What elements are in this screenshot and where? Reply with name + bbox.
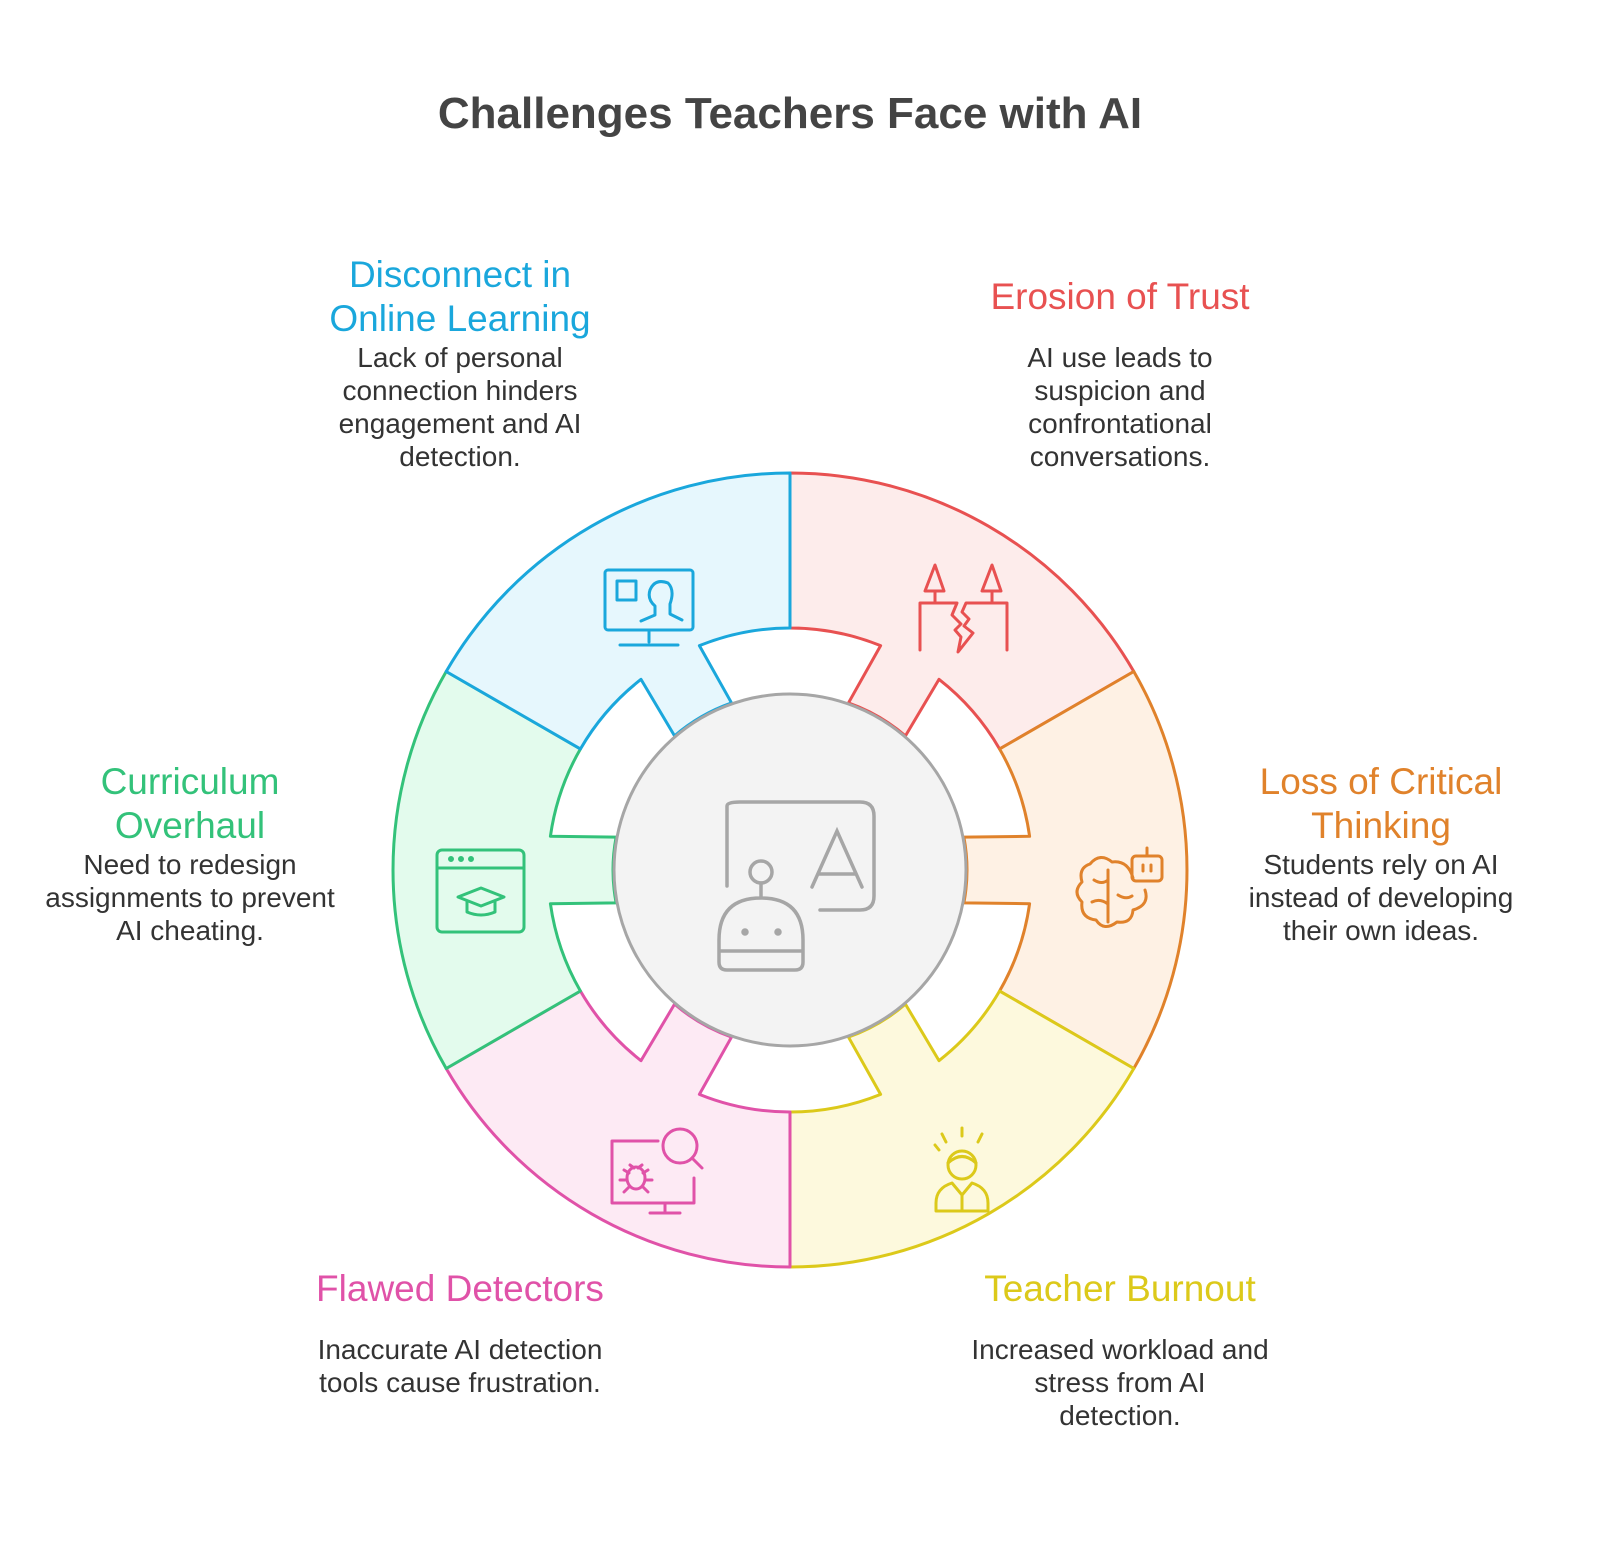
text: critical thinking: their own ideas. xyxy=(1283,915,1479,946)
text: curriculum: Need to redesign xyxy=(83,849,297,880)
icon: monitor person xyxy=(605,570,693,645)
text: curriculum: Curriculum xyxy=(101,761,279,802)
segment: curriculum xyxy=(393,672,616,1068)
text: erosion of trust xyxy=(990,276,1250,472)
segment: disconnect xyxy=(420,427,875,819)
text: curriculum: AI cheating. xyxy=(116,915,264,946)
text: flawed detectors: Inaccurate AI detection xyxy=(318,1334,602,1365)
icon: trust broken xyxy=(920,565,1007,652)
segment: burnout xyxy=(705,921,1160,1313)
text: curriculum xyxy=(45,761,335,946)
segment: flawed detectors xyxy=(420,921,875,1313)
segment: critical thinking xyxy=(964,672,1187,1068)
text: curriculum: assignments to prevent xyxy=(45,882,335,913)
text: erosion of trust: AI use leads to xyxy=(1027,342,1213,373)
text: erosion of trust: conversations. xyxy=(1030,441,1210,472)
text: curriculum: Overhaul xyxy=(115,805,265,846)
text: disconnect: Online Learning xyxy=(329,298,591,339)
text: burnout xyxy=(971,1268,1269,1431)
text: critical thinking: Thinking xyxy=(1311,805,1451,846)
text: burnout: Increased workload and xyxy=(971,1334,1269,1365)
text: flawed detectors xyxy=(316,1268,604,1398)
title: Challenges Teachers Face with AI xyxy=(438,89,1142,138)
text: flawed detectors: Flawed Detectors xyxy=(316,1268,604,1309)
icon: stressed person xyxy=(935,1128,988,1211)
text: burnout: detection. xyxy=(1059,1400,1181,1431)
text: critical thinking xyxy=(1249,761,1513,946)
icon: bug detector xyxy=(612,1129,702,1213)
text: disconnect xyxy=(329,254,591,472)
segment: erosion of trust xyxy=(705,427,1160,819)
text: erosion of trust: confrontational xyxy=(1028,408,1212,439)
text: burnout: Teacher Burnout xyxy=(984,1268,1256,1309)
text: critical thinking: Students rely on AI xyxy=(1263,849,1499,880)
text: burnout: stress from AI xyxy=(1034,1367,1206,1398)
text: critical thinking: Loss of Critical xyxy=(1260,761,1502,802)
text: disconnect: connection hinders xyxy=(342,375,578,406)
text: flawed detectors: tools cause frustration. xyxy=(319,1367,601,1398)
icon: center AI teacher xyxy=(719,802,874,970)
icon: browser graduation xyxy=(437,850,524,932)
text: disconnect: detection. xyxy=(399,441,521,472)
center circle xyxy=(614,694,966,1046)
text: erosion of trust: Erosion of Trust xyxy=(990,276,1250,317)
text: critical thinking: instead of developing xyxy=(1249,882,1513,913)
text: disconnect: Disconnect in xyxy=(349,254,571,295)
text: erosion of trust: suspicion and xyxy=(1034,375,1206,406)
icon: brain xyxy=(1077,848,1162,927)
text: disconnect: Lack of personal xyxy=(357,342,563,373)
text: disconnect: engagement and AI xyxy=(339,408,581,439)
